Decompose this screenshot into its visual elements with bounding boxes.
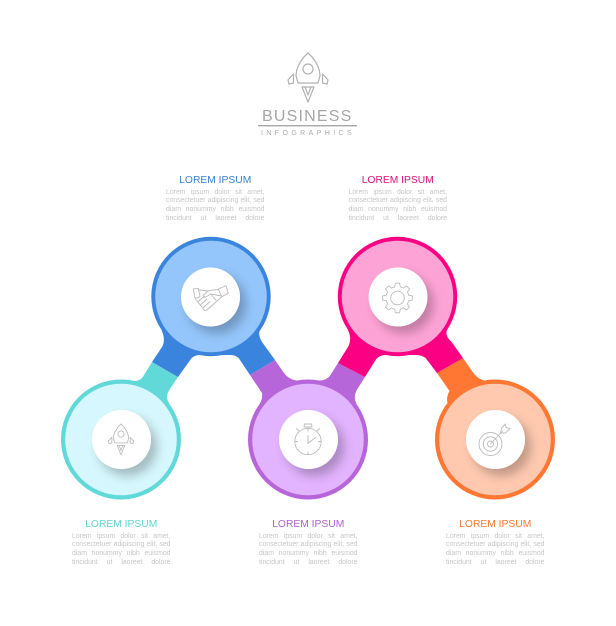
body text: purple: consectetuer adipiscing elit, sed [259, 541, 358, 548]
white disc: orange [466, 410, 525, 469]
body text: pink: consectetuer adipiscing elit, sed [348, 197, 447, 204]
node: pink [338, 237, 463, 377]
body text: orange: tincidunt ut laoreet dolore [446, 559, 544, 566]
header logo: rocket and business infographics [258, 53, 357, 137]
node: blue [151, 237, 275, 377]
body text: teal [72, 532, 170, 566]
body text: teal: tincidunt ut laoreet dolore [72, 559, 170, 566]
node: purple [248, 360, 368, 500]
text block: teal [72, 519, 170, 566]
body text: blue [166, 188, 264, 222]
heading: BUSINESS: BUSINESS [262, 108, 353, 125]
divider under heading [258, 125, 357, 126]
white disc: blue [181, 268, 240, 326]
body text: orange: consectetuer adipiscing elit, sed [446, 541, 544, 548]
body text: blue: tincidunt ut laoreet dolore [166, 215, 264, 222]
text block: purple [259, 519, 358, 566]
subheading: INFOGRAPHICS: INFOGRAPHICS [261, 130, 355, 137]
body text: teal: diam nonummy nibh euismod [72, 550, 170, 557]
heading: teal: LOREM IPSUM [85, 519, 157, 530]
body text: pink: Lorem ipsum dolor sit amet, [348, 188, 447, 196]
heading: pink: LOREM IPSUM [362, 175, 434, 186]
body text: purple: diam nonummy nibh euismod [259, 550, 358, 557]
body text: purple: tincidunt ut laoreet dolore [259, 559, 358, 566]
text block: pink [348, 175, 447, 222]
body text: pink: diam nonummy nibh euismod [348, 206, 447, 213]
heading: blue: LOREM IPSUM [179, 175, 251, 186]
body text: purple: Lorem ipsum dolor sit amet, [259, 532, 358, 540]
body text: purple [259, 532, 358, 566]
icon: target with arrow [479, 424, 510, 456]
icon: gear [383, 283, 412, 313]
body text: teal: consectetuer adipiscing elit, sed [72, 541, 170, 548]
text block: orange [446, 519, 544, 566]
body text: blue: Lorem ipsum dolor sit amet, [166, 188, 264, 196]
body text: orange: diam nonummy nibh euismod [446, 550, 544, 557]
white disc: teal [92, 410, 151, 469]
icon: rocket [108, 424, 134, 455]
heading: orange: LOREM IPSUM [459, 519, 531, 530]
node: teal [61, 362, 181, 500]
body text: blue: diam nonummy nibh euismod [166, 206, 264, 213]
text block: blue [166, 175, 264, 222]
icon: stopwatch [295, 424, 321, 455]
white disc: purple [279, 410, 338, 469]
white disc: pink [368, 268, 428, 326]
body text: teal: Lorem ipsum dolor sit amet, [72, 532, 170, 540]
body text: pink: tincidunt ut laoreet dolore [348, 215, 447, 222]
icon: header rocket [288, 53, 328, 102]
body text: pink [348, 188, 447, 222]
body text: orange: Lorem ipsum dolor sit amet, [446, 532, 544, 540]
icon: handshake [193, 286, 228, 310]
body text: blue: consectetuer adipiscing elit, sed [166, 197, 264, 204]
heading: purple: LOREM IPSUM [272, 519, 344, 530]
node: orange [435, 358, 555, 500]
body text: orange [446, 532, 544, 566]
